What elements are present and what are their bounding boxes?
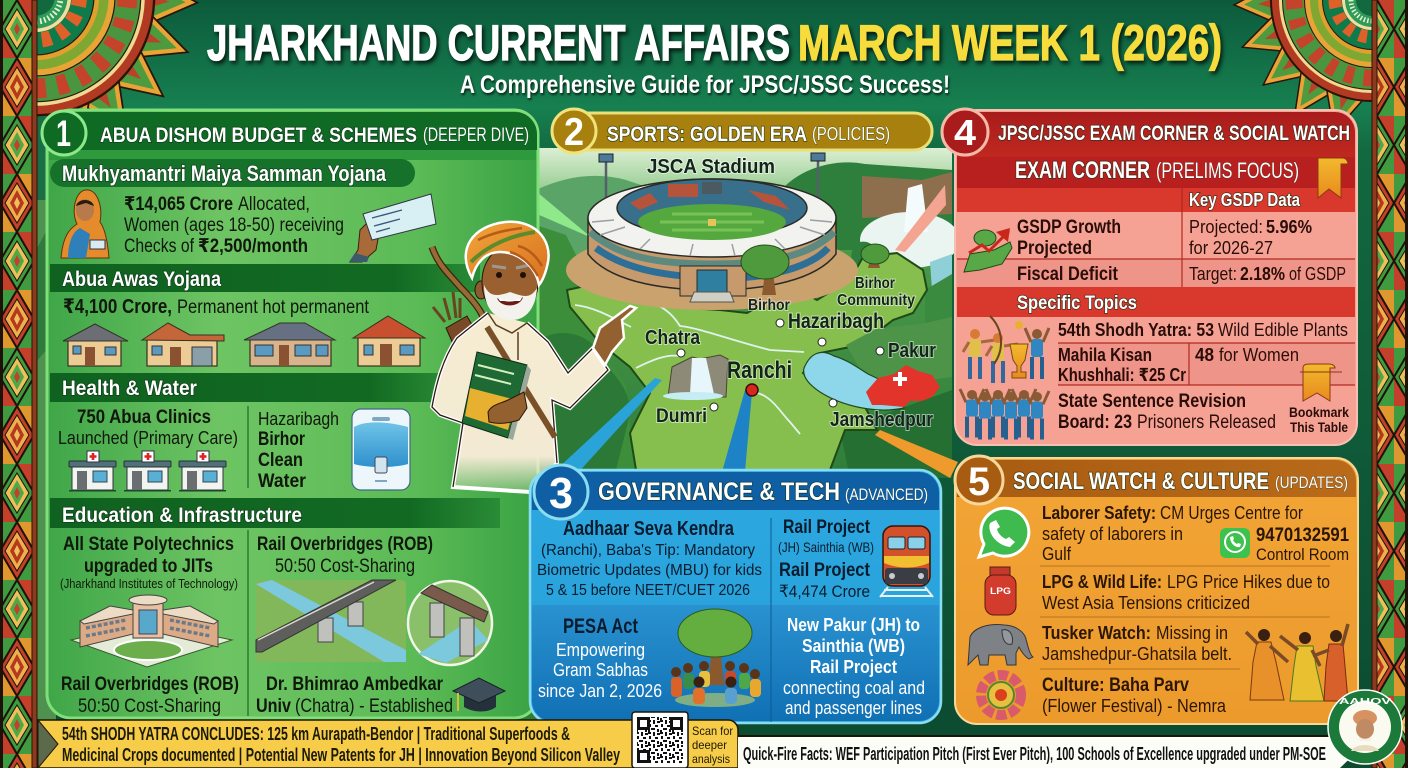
mascot: tribal elder pointing at map [432,222,636,492]
GSDP table: for 2026-27 [1189,238,1273,258]
GSDP table: Target: [1189,264,1237,284]
Aadhaar Seva Kendra text: Aadhaar Seva Kendra [563,518,735,540]
badge 3 [534,465,588,519]
icon: elephant [968,624,1033,665]
specific topics: State Sentence Revision [1058,391,1246,412]
culture text: Culture: Baha Parv [1042,675,1189,696]
pointing hand [593,306,636,365]
tusker text [1042,623,1232,664]
panel 1 heading: (DEEPER DIVE) [423,125,529,146]
badge 1: 1 [56,113,71,154]
scan note: analysis [692,752,730,766]
scheme: Mukhyamantri Maiya Samman Yojana: Women (ages 18-50) receiving [124,215,344,236]
GSDP table: GSDP Growth [1017,217,1121,238]
bookmark note [1289,364,1349,435]
scheme: Abua Awas Yojana: Abua Awas Yojana [62,268,221,291]
scheme: Education and Infrastructure [60,504,505,717]
forest east of river [846,317,952,385]
icon: growth arrow with money [964,228,1012,272]
Jharkhand state map [567,253,927,470]
PESA Act text: Gram Sabhas [553,660,648,680]
rail project text: (JH) Sainthia (WB) [778,539,874,555]
scheme: Education and Infrastructure: 50:50 Cost-Sharing [275,556,415,577]
specific topics: Specific Topics [1017,293,1137,314]
tusker text: Tusker Watch: [1042,623,1151,643]
map labels: Chatra [645,327,701,349]
new Pakur rail text: Sainthia (WB) [802,636,905,656]
scheme: Education and Infrastructure: Dr. Bhimrao Ambedkar [266,674,444,695]
badge 5 [955,456,1003,504]
map labels: Hazaribagh [788,310,884,333]
badge 1 [42,111,86,155]
bottom ticker: Shodh Yatra [38,720,738,768]
culture text: (Flower Festival) - Nemra [1042,696,1227,716]
forest tufts [536,225,636,480]
face [475,246,538,320]
new Pakur rail text: and passenger lines [785,698,922,718]
callout wedges [537,185,958,478]
map scene: Jharkhand and sports panel backdrop [536,148,960,480]
scheme: Mukhyamantri Maiya Samman Yojana: ₹14,065 Crore [124,194,233,215]
panel 2: sports heading: (POLICIES) [812,124,890,144]
Aadhaar Seva Kendra text [537,518,762,599]
river lake [804,352,904,410]
panel 3 heading: (ADVANCED) [845,485,928,504]
scheme: Education and Infrastructure: All State Polytechnics [63,534,234,555]
icon: LPG cylinder [985,567,1016,615]
GSDP table: 5.96% [1266,217,1312,237]
scan note [692,724,733,766]
icon: JSCA stadium [566,153,889,310]
GSDP table [1017,190,1346,285]
map labels: Birhor [748,297,790,314]
badge 3: 3 [549,469,573,518]
scheme: Mukhyamantri Maiya Samman Yojana: ₹2,500/month [198,236,308,257]
rail project text: Rail Project [783,517,871,538]
scheme: Education and Infrastructure: Rail Overbridges (ROB) [257,534,433,555]
icon: dancers [1246,624,1348,701]
PESA Act text: Empowering [556,640,645,660]
bow and quiver [432,247,493,351]
panel 5 heading: SOCIAL WATCH & CULTURE [1013,468,1269,495]
icon: train [880,526,933,597]
laborer safety text [1042,503,1303,564]
icon: LPG cylinder: LPG [990,586,1011,596]
panel 3 heading: GOVERNANCE & TECH [598,478,840,506]
Aadhaar Seva Kendra text: 5 & 15 before NEET/CUET 2026 [546,582,750,599]
left tribal border [0,0,37,768]
GSDP table: Projected [1017,238,1092,259]
LPG text: LPG Price Hikes due to [1167,572,1330,592]
map labels: Birhor [855,275,895,292]
icon: tree with gram sabha [671,609,761,707]
arm hand on book [488,392,527,423]
icon: whatsapp [979,508,1029,557]
scheme: Education and Infrastructure: (Jharkhand Institutes of Technology) [60,576,238,591]
scheme: Health and Water: 750 Abua Clinics [77,407,211,428]
scheme: Health and Water: Health & Water [62,377,197,400]
icon: hand with payment card [349,194,436,262]
scheme: Health and Water [58,377,410,492]
specific topics: Board: 23 [1058,412,1132,433]
panel 5 heading: (UPDATES) [1275,473,1348,492]
control room contact: Control Room [1256,545,1349,564]
Aadhaar Seva Kendra text: Biometric Updates (MBU) for kids [537,562,762,579]
tusker text: Jamshedpur-Ghatsila belt. [1042,644,1232,664]
PESA Act text [538,615,662,701]
right tribal border [1372,0,1408,768]
scheme: Health and Water: Birhor [258,429,305,450]
badge 5: 5 [968,460,990,504]
rail project text: ₹4,474 Crore [779,582,870,601]
quick-fire facts strip [738,735,1372,768]
scheme: Education and Infrastructure: Univ [256,696,291,717]
exam corner subheading [1015,157,1299,184]
tusker text: Missing in [1156,623,1228,643]
scheme: Abua Awas Yojana: Permanent hot permanent [177,297,370,318]
new Pakur rail text [783,615,925,718]
GSDP table: Fiscal Deficit [1017,264,1119,285]
laborer safety text: Laborer Safety: [1042,503,1156,523]
bookmark note: This Table [1290,419,1348,435]
scheme: Abua Awas Yojana: ₹4,100 Crore, [63,296,172,318]
LPG text: West Asia Tensions criticized [1042,593,1250,613]
panel 5: social watch and culture [955,456,1358,724]
laborer safety text: safety of laborers in [1042,524,1183,544]
collar and strap [488,313,527,360]
control room contact [1220,525,1349,564]
map labels: Pakur [888,340,936,362]
map labels: Community [837,292,915,309]
GSDP table: Projected: [1189,217,1263,237]
mini waterfall [668,355,728,397]
PESA Act text: PESA Act [563,615,638,638]
scheme: Education and Infrastructure: upgraded to JITs [84,556,213,577]
icon: water purifier [352,409,410,490]
panel 1 heading: ABUA DISHOM BUDGET & SCHEMES [100,124,417,147]
top right mandala [1233,0,1408,138]
specific topics: Wild Edible Plants [1218,320,1348,340]
seal badge [1328,690,1402,764]
scheme: Health and Water: Clean [258,450,303,471]
turban [466,222,549,285]
LPG text [1042,572,1330,613]
control room contact: 9470132591 [1256,525,1349,546]
specific topics: for Women [1219,345,1299,365]
icon: woman holding card [61,190,109,258]
panel 3: governance and tech [530,465,941,723]
icon: archers, trophy and team [960,316,1049,439]
new Pakur rail text: Rail Project [810,657,897,677]
cliff and right waterfall [862,172,952,218]
scheme: Health and Water: Launched (Primary Care) [58,428,238,448]
forest scenery background [36,110,540,725]
Aadhaar Seva Kendra text: (Ranchi), Baba's Tip: Mandatory [541,542,755,559]
icon: four houses [63,316,425,366]
icon: bookmark ribbon [1318,158,1348,198]
GSDP table: Key GSDP Data [1189,190,1301,210]
LPG text: LPG & Wild Life: [1042,572,1162,592]
scheme: Health and Water: Hazaribagh [258,409,339,429]
map labels: Ranchi [727,357,792,384]
badge 4 [942,109,988,155]
specific topics: 48 [1195,345,1214,365]
red marker shape [866,365,940,407]
scheme: Mukhyamantri Maiya Samman Yojana [61,161,436,262]
panel 2: sports heading [552,109,932,154]
scheme: Education and Infrastructure: 50:50 Cost-Sharing [78,696,221,717]
title: MARCH WEEK 1 (2026) [798,15,1222,71]
scheme: Mukhyamantri Maiya Samman Yojana: Mukhyamantri Maiya Samman Yojana [62,161,387,186]
kurta [432,313,608,492]
icon: flower [981,675,1021,715]
scheme: Abua Awas Yojana [62,268,425,366]
title: JHARKHAND CURRENT AFFAIRS [207,15,790,71]
scheme: Mukhyamantri Maiya Samman Yojana: Checks of [124,236,195,257]
subtitle: A Comprehensive Guide for JPSC/JSSC Success! [460,71,950,99]
GSDP table: 2.18% [1240,264,1285,284]
icon: clinics [69,451,226,492]
icon: graduation cap [453,678,505,712]
QR code [632,712,688,768]
specific topics: 54th Shodh Yatra: 53 [1058,320,1214,340]
book [462,352,531,440]
new Pakur rail text: connecting coal and [783,678,925,698]
laborer safety text: CM Urges Centre for [1160,503,1303,523]
scan note: Scan for [692,724,733,738]
icon: polytechnic campus [71,595,232,667]
new Pakur rail text: New Pakur (JH) to [787,615,920,635]
bookmark note: Bookmark [1289,404,1349,420]
map labels: JSCA Stadium [647,156,775,178]
top left mandala [0,0,198,159]
rail project text [778,517,874,601]
badge 4: 4 [954,112,976,153]
specific topics [1017,293,1348,433]
scheme: Health and Water: Water [258,471,307,492]
GSDP table: of GSDP [1289,264,1346,284]
exam corner subheading: (PRELIMS FOCUS) [1156,158,1299,183]
map labels: Dumri [656,406,707,427]
PESA Act text: since Jan 2, 2026 [538,681,662,701]
map labels: Jamshedpur [830,409,933,431]
specific topics: Mahila Kisan [1058,345,1152,365]
laborer safety text: Gulf [1042,544,1072,564]
scan note: deeper [692,738,727,752]
bottom ticker: Shodh Yatra: Medicinal Crops documented | Potential New Patents for JH | Innovation Beyond Silicon Valley [62,745,620,765]
exam corner subheading: EXAM CORNER [1015,157,1150,184]
map labels [645,156,936,431]
specific topics: Khushhali: ₹25 Cr [1058,365,1186,385]
rail project text: Rail Project [779,560,871,581]
panel 4: exam corner [942,109,1357,445]
panel 2: sports heading: 2 [564,111,584,154]
culture text [1042,675,1227,716]
scheme: Education and Infrastructure: Rail Overbridges (ROB) [61,674,239,695]
seal badge: AAHOV [1339,697,1392,706]
icon: rail overbridge scene [256,580,492,665]
bottom ticker: Shodh Yatra: 54th SHODH YATRA CONCLUDES: 125 km Aurapath-Bendor | Traditional Superfoods & [62,724,570,744]
specific topics: Prisoners Released [1137,412,1276,433]
scheme: Education and Infrastructure: Education & Infrastructure [62,504,302,527]
scheme: Mukhyamantri Maiya Samman Yojana: Allocated, [238,194,310,215]
panel 2: sports heading: SPORTS: GOLDEN ERA [607,123,807,146]
scheme: Education and Infrastructure: (Chatra) - Established [295,696,453,717]
